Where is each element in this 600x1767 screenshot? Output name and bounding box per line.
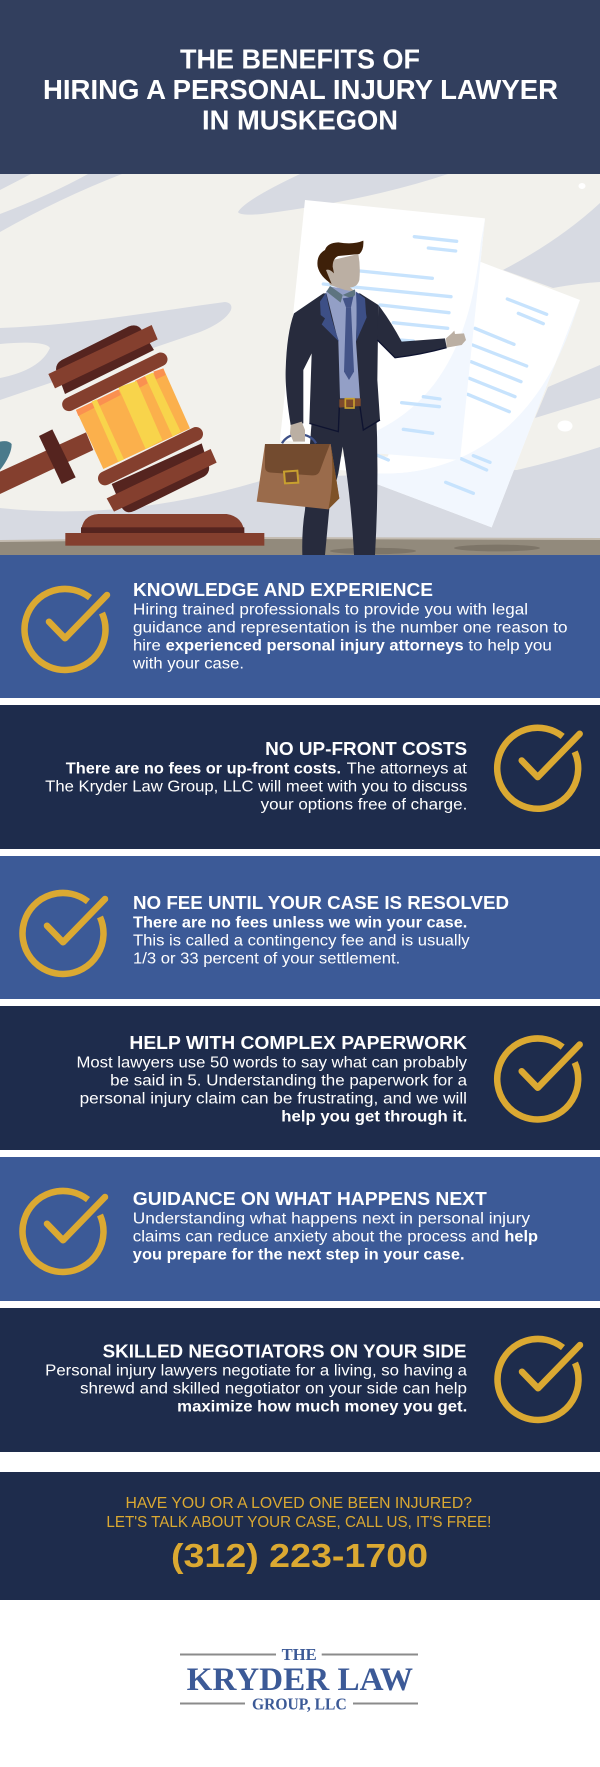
title: THE BENEFITS OF (180, 44, 420, 74)
text block: be said in 5. Understanding the paperwork for a (110, 1073, 467, 1090)
icon: check circle (24, 589, 107, 670)
icon: check circle (22, 1191, 105, 1272)
text block: claims can reduce anxiety about the process and (133, 1228, 499, 1245)
text block: There are no fees or up-front costs. (66, 760, 341, 777)
text block: Most lawyers use 50 words to say what can probably (76, 1055, 467, 1072)
lawyer figure (257, 241, 466, 555)
text block: maximize how much money you get. (177, 1399, 467, 1416)
text block: 1/3 or 33 percent of your settlement. (133, 950, 400, 967)
text block: shrewd and skilled negotiator on your side can help (80, 1381, 467, 1398)
text block (45, 1363, 467, 1416)
text block: with your case. (132, 656, 244, 673)
panel: guidance (0, 1157, 600, 1301)
heading: SKILLED NEGOTIATORS ON YOUR SIDE (103, 1342, 466, 1362)
text block: Understanding what happens next in personal injury (133, 1210, 530, 1227)
title: HIRING A PERSONAL INJURY LAWYER (43, 74, 558, 105)
panel: knowledge and experience (0, 555, 600, 698)
text block: The attorneys at (347, 760, 468, 777)
heading: HELP WITH COMPLEX PAPERWORK (129, 1033, 467, 1053)
icon: check circle (22, 893, 105, 974)
panel: call to action (0, 1472, 600, 1600)
text block: your options free of charge. (261, 796, 467, 813)
logo: THE (282, 1645, 317, 1664)
text block: guidance and representation is the number one reason to (133, 620, 568, 637)
panel: no up-front costs (0, 705, 600, 849)
icon: check circle (497, 728, 580, 809)
text block (133, 914, 470, 967)
callout text: LET'S TALK ABOUT YOUR CASE, CALL US, IT'S FREE! (106, 1514, 491, 1531)
text block: hire (133, 638, 161, 655)
documents (280, 200, 580, 527)
ground (0, 537, 600, 555)
heading: KNOWLEDGE AND EXPERIENCE (133, 580, 433, 600)
text block (132, 602, 568, 673)
panel: header (0, 0, 600, 174)
text block (45, 760, 468, 813)
text block: personal injury claim can be frustrating, and we will (80, 1091, 467, 1108)
heading: NO FEE UNTIL YOUR CASE IS RESOLVED (133, 893, 509, 913)
text block: to help you (468, 638, 552, 655)
logo (180, 1645, 418, 1713)
gavel (0, 325, 264, 546)
panel: no fee until resolved (0, 856, 600, 999)
background blobs (0, 174, 600, 540)
panel: complex paperwork (0, 1006, 600, 1150)
title (43, 44, 558, 136)
heading: GUIDANCE ON WHAT HAPPENS NEXT (133, 1189, 487, 1209)
panel: skilled negotiators (0, 1308, 600, 1452)
text block: experienced personal injury attorneys (166, 638, 464, 655)
text block: This is called a contingency fee and is usually (133, 932, 470, 949)
text block: help (504, 1228, 538, 1245)
callout text: HAVE YOU OR A LOVED ONE BEEN INJURED? (126, 1495, 472, 1512)
text block: Hiring trained professionals to provide you with legal (133, 602, 528, 619)
logo: GROUP, LLC (252, 1694, 347, 1713)
text block: Personal injury lawyers negotiate for a living, so having a (45, 1363, 467, 1380)
text block: you prepare for the next step in your case. (133, 1246, 465, 1263)
text block (133, 1210, 538, 1263)
callout text (106, 1495, 491, 1531)
phone number: (312) 223-1700 (171, 1537, 428, 1574)
logo: KRYDER LAW (187, 1662, 413, 1698)
text block: The Kryder Law Group, LLC will meet with you to discuss (45, 778, 468, 795)
text block: help you get through it. (281, 1109, 467, 1126)
text block (76, 1055, 467, 1126)
icon: check circle (497, 1038, 580, 1119)
icon: check circle (497, 1339, 580, 1420)
illustration: lawyer and gavel (0, 174, 600, 555)
heading: NO UP-FRONT COSTS (265, 739, 467, 759)
title: IN MUSKEGON (202, 104, 398, 136)
text block: There are no fees unless we win your case. (133, 914, 467, 931)
